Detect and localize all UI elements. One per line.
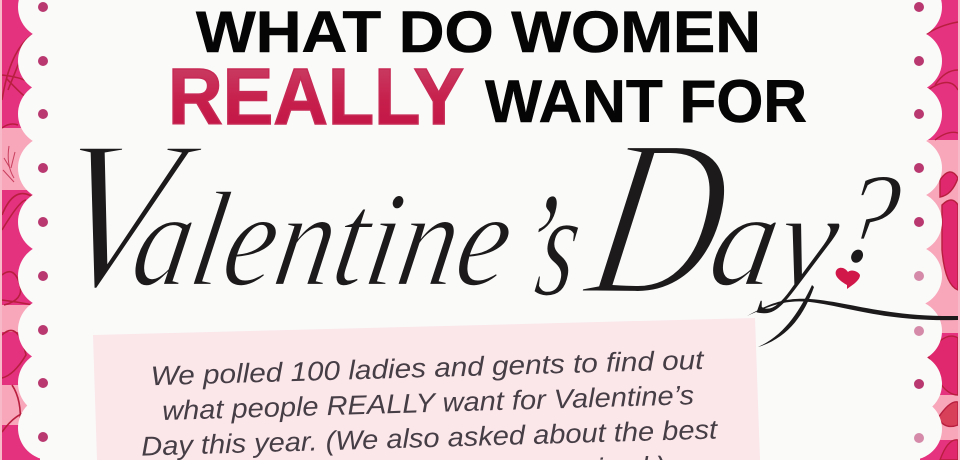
- script title: valentine's day: ?: [827, 147, 910, 291]
- title: what do women: WHAT DO WOMEN: [196, 0, 761, 65]
- intro text line 1: We polled 100 ladies and gents to find out: [150, 345, 706, 391]
- panel: right floral border: [920, 0, 960, 460]
- script title: valentine's day: D: [571, 94, 747, 343]
- panel: intro box: [93, 318, 760, 460]
- punched dots left: [38, 2, 48, 442]
- script title: valentine's day: ay: [700, 164, 852, 315]
- icon: heart: [836, 268, 860, 289]
- script title: valentine's day: V: [35, 95, 214, 334]
- script title: valentine's day: ’s: [506, 161, 594, 328]
- script title: valentine's day: [35, 94, 910, 343]
- intro text line 2: what people REALLY want for Valentine’s: [162, 380, 694, 426]
- flourish: [747, 285, 958, 347]
- title: want for: WANT FOR: [485, 68, 807, 135]
- title: really: REALLY: [168, 52, 464, 141]
- script title: valentine's day: alentine: [123, 164, 524, 315]
- punched dots right: [914, 2, 924, 443]
- panel: left floral border: [0, 0, 40, 460]
